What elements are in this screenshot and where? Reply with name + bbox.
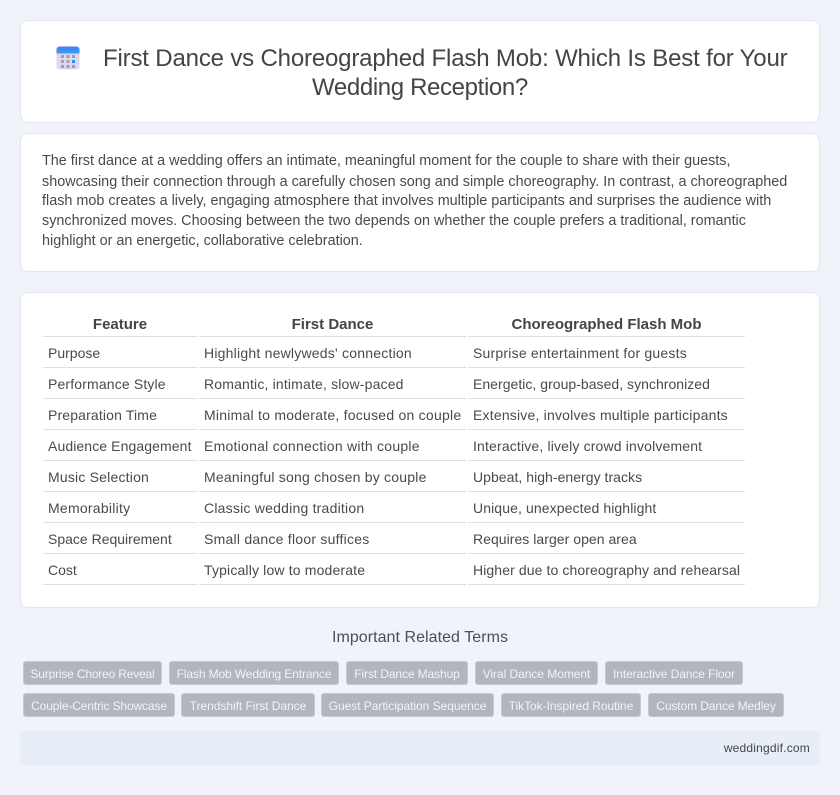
related term tags: TikTok-Inspired Routine — [509, 699, 633, 713]
comparison table: First Dance — [292, 316, 373, 333]
comparison table: Minimal to moderate, focused on couple — [204, 407, 461, 423]
text block: introduction: The first dance at a wedding offers an intimate, meaningful moment for the couple to share with their guests, — [42, 153, 730, 169]
related term tags: Interactive Dance Floor — [613, 667, 735, 681]
panel: title header — [20, 20, 820, 123]
comparison table: Music Selection — [48, 469, 149, 485]
comparison table: Highlight newlyweds' connection — [204, 345, 412, 361]
comparison table: Purpose — [48, 345, 100, 361]
comparison table: Feature — [93, 316, 147, 333]
comparison table: Surprise entertainment for guests — [473, 345, 687, 361]
comparison table: Extensive, involves multiple participants — [473, 407, 728, 423]
icon: calendar — [56, 46, 80, 70]
comparison table: Meaningful song chosen by couple — [204, 469, 427, 485]
related term tags: Custom Dance Medley — [656, 699, 776, 713]
text block: introduction: flash mob creates a lively, engaging atmosphere that involves multiple participants and surprises the audience with — [42, 193, 771, 209]
title: First Dance vs Choreographed Flash Mob: Which Is Best for Your — [103, 45, 787, 72]
comparison table: Higher due to choreography and rehearsal — [473, 562, 740, 578]
text block: introduction: synchronized moves. Choosing between the two depends on whether the couple prefers a traditional, romantic — [42, 213, 746, 229]
title — [103, 45, 788, 101]
comparison table: Interactive, lively crowd involvement — [473, 438, 702, 454]
related term tags: Flash Mob Wedding Entrance — [177, 667, 331, 681]
related term tags: Surprise Choreo Reveal — [30, 667, 155, 681]
text block: introduction: showcasing their connection through a carefully chosen song and simple choreography. In contrast, a choreographed — [42, 174, 787, 190]
comparison table — [43, 316, 745, 585]
comparison table: Cost — [48, 562, 77, 578]
footer: source site: weddingdif.com — [724, 741, 810, 755]
text block: introduction — [42, 153, 787, 249]
related term tags: Trendshift First Dance — [190, 699, 306, 713]
related term tags: Guest Participation Sequence — [329, 699, 486, 713]
related term tags: Viral Dance Moment — [483, 667, 590, 681]
comparison table: Audience Engagement — [48, 438, 192, 454]
related term tags: Couple-Centric Showcase — [31, 699, 167, 713]
comparison table: Emotional connection with couple — [204, 438, 420, 454]
comparison table: Romantic, intimate, slow-paced — [204, 376, 404, 392]
comparison table: Preparation Time — [48, 407, 157, 423]
related term tags — [23, 661, 784, 717]
comparison table: Performance Style — [48, 376, 166, 392]
comparison table: Typically low to moderate — [204, 562, 365, 578]
heading: important related terms: Important Related Terms — [332, 629, 508, 646]
text block: introduction: highlight or an energetic, collaborative celebration. — [42, 233, 363, 249]
related term tags: First Dance Mashup — [354, 667, 460, 681]
title: Wedding Reception? — [312, 74, 528, 101]
footer bar — [20, 731, 820, 765]
comparison table: Small dance floor suffices — [204, 531, 370, 547]
panel: introduction text — [20, 133, 820, 272]
comparison table: Energetic, group-based, synchronized — [473, 376, 710, 392]
comparison table: Unique, unexpected highlight — [473, 500, 656, 516]
comparison table: Requires larger open area — [473, 531, 637, 547]
comparison table: Space Requirement — [48, 531, 172, 547]
comparison table: Upbeat, high-energy tracks — [473, 469, 642, 485]
comparison table: Choreographed Flash Mob — [511, 316, 702, 333]
panel: comparison table — [20, 292, 820, 608]
comparison table: Classic wedding tradition — [204, 500, 364, 516]
comparison table: Memorability — [48, 500, 130, 516]
